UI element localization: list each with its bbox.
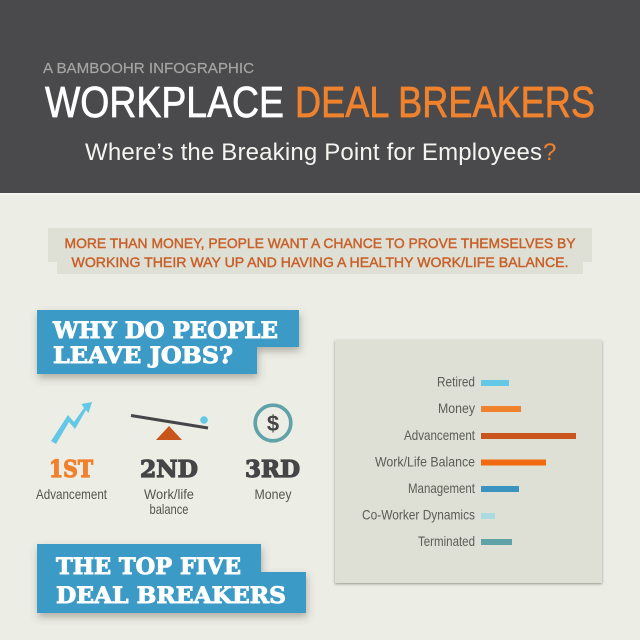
rank 2: work/life balance: Work/life [144, 486, 194, 502]
intro callout [48, 228, 592, 274]
rank 2: work/life balance [140, 456, 198, 517]
heading: why do people leave jobs: WHY DO PEOPLE [52, 318, 278, 344]
bar: advancement: Advancement [404, 427, 475, 443]
rank 3: money: Money [254, 486, 292, 502]
heading: top five deal breakers [37, 544, 306, 613]
icon: rising arrow [51, 402, 92, 444]
subtitle: Where’s the Breaking Point for Employees [85, 139, 542, 166]
heading: top five deal breakers: DEAL BREAKERS [56, 583, 286, 609]
heading: why do people leave jobs [37, 310, 299, 374]
bar: advancement [404, 427, 576, 443]
rank 3: money: 3RD [245, 456, 300, 483]
intro callout: WORKING THEIR WAY UP AND HAVING A HEALTHY WORK/LIFE BALANCE. [72, 254, 568, 270]
rank 2: work/life balance: 2ND [140, 456, 198, 483]
heading: top five deal breakers: THE TOP FIVE [56, 554, 241, 580]
title: WORKPLACE [45, 78, 284, 127]
intro callout: MORE THAN MONEY, PEOPLE WANT A CHANCE TO PROVE THEMSELVES BY [64, 235, 576, 251]
bar: work/life balance: Work/Life Balance [375, 454, 475, 470]
subtitle: ? [543, 139, 556, 166]
rank 1: advancement: 1ST [49, 456, 93, 483]
rank 1: advancement [36, 456, 107, 502]
bar: money: Money [438, 400, 475, 416]
bar: terminated: Terminated [418, 533, 475, 549]
rank 2: work/life balance: balance [150, 501, 189, 517]
rank 1: advancement: Advancement [36, 486, 107, 502]
rank 3: money [245, 456, 300, 502]
bar: work/life balance [375, 454, 546, 470]
panel: bar chart [335, 340, 602, 583]
icon: seesaw [131, 416, 208, 440]
heading: why do people leave jobs: LEAVE JOBS? [53, 343, 233, 369]
bar: retired: Retired [437, 374, 475, 390]
bar: co-worker dynamics: Co-Worker Dynamics [362, 506, 475, 522]
icon: dollar coin [255, 405, 291, 441]
bar: retired [437, 374, 509, 390]
bar: money [438, 400, 521, 416]
eyebrow text: A BAMBOOHR INFOGRAPHIC [43, 60, 254, 77]
bar: management: Management [408, 480, 475, 496]
header band [0, 0, 640, 195]
icon: dollar coin: $ [267, 411, 279, 436]
